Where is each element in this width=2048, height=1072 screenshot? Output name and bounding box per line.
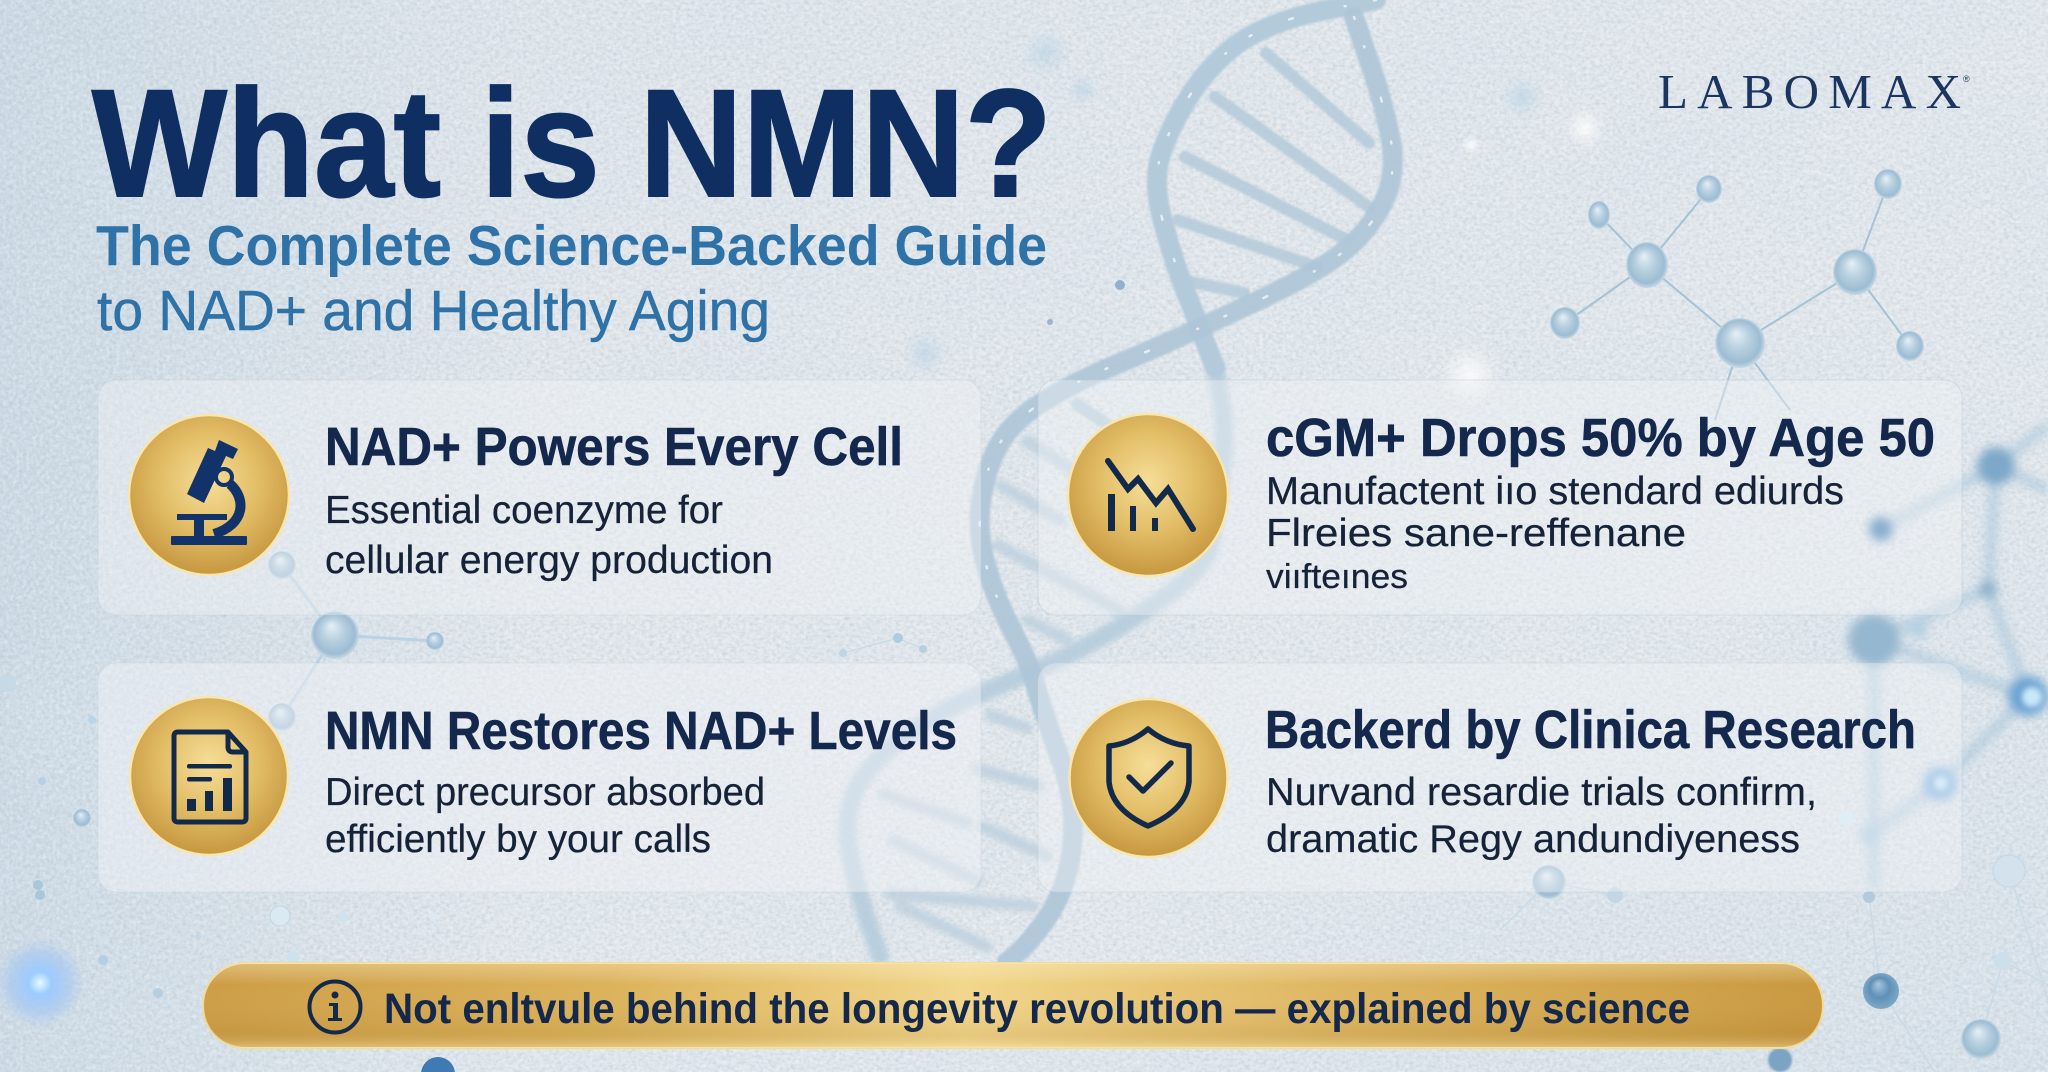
strand A lower — [847, 367, 1224, 956]
particles: soft background dots — [839, 29, 1605, 657]
subtitle: The Complete Science-Backed Guide — [96, 214, 1047, 278]
panel: cGM+ drops — [1038, 380, 1962, 615]
body text: Manufactent iıo stendard ediurds — [1266, 470, 1844, 513]
lower DNA rungs — [883, 441, 1120, 947]
strand B — [980, 17, 1393, 962]
body text: dramatic Regy andundiyeness — [1266, 818, 1800, 861]
subtitle — [96, 214, 1047, 343]
heading: Backerd by Clinica Research — [1265, 700, 1916, 760]
icon: declining chart — [1068, 414, 1228, 576]
upper DNA rungs — [1077, 53, 1369, 440]
callout banner — [203, 963, 1823, 1048]
DNA sparkle — [980, 0, 1393, 607]
strand A upper — [1157, 0, 1376, 367]
logo: LABOMAX: LABOMAX — [1658, 64, 1961, 119]
body text — [1266, 771, 1817, 861]
molecule: right blurred — [1838, 425, 2048, 890]
glow orb: bottom left — [0, 937, 86, 1029]
body text: viıfteınes — [1266, 558, 1408, 596]
ball: bottom blue — [421, 1057, 455, 1072]
icon: document with bars — [130, 697, 288, 855]
body text: Nurvand resardie trials confirm, — [1266, 771, 1817, 814]
body text: Direct precursor absorbed — [325, 771, 765, 814]
panel: backed by clinical research — [1038, 663, 1962, 892]
body text: cellular energy production — [325, 539, 773, 582]
molecules: bottom right — [1500, 855, 2048, 1072]
panel: NAD+ powers every cell — [98, 380, 981, 615]
body text — [325, 771, 765, 861]
icon: shield check — [1070, 699, 1228, 857]
icon: microscope — [129, 415, 289, 575]
body text: Essential coenzyme for — [325, 489, 723, 532]
molecule: left — [268, 551, 444, 731]
banner text: Not enltvule behind the longevity revolution — explained by science — [384, 985, 1690, 1033]
subtitle: to NAD+ and Healthy Aging — [97, 279, 770, 343]
body text: efficiently by your calls — [325, 818, 711, 861]
heading: cGM+ Drops 50% by Age 50 — [1266, 408, 1935, 468]
molecule: top right — [1550, 169, 1924, 420]
body text: Flreies sane-reffenane — [1266, 512, 1686, 555]
heading: NMN Restores NAD+ Levels — [325, 701, 957, 761]
icon: info — [310, 982, 360, 1032]
body text — [1266, 470, 1844, 596]
body text — [325, 489, 773, 582]
DNA helix — [847, 0, 1393, 962]
panel: NMN restores — [98, 663, 981, 892]
network: bottom left — [0, 640, 437, 1072]
title: What is NMN? — [92, 58, 1052, 229]
logo: LABOMAX: ® — [1963, 74, 1970, 84]
heading: NAD+ Powers Every Cell — [325, 417, 903, 477]
